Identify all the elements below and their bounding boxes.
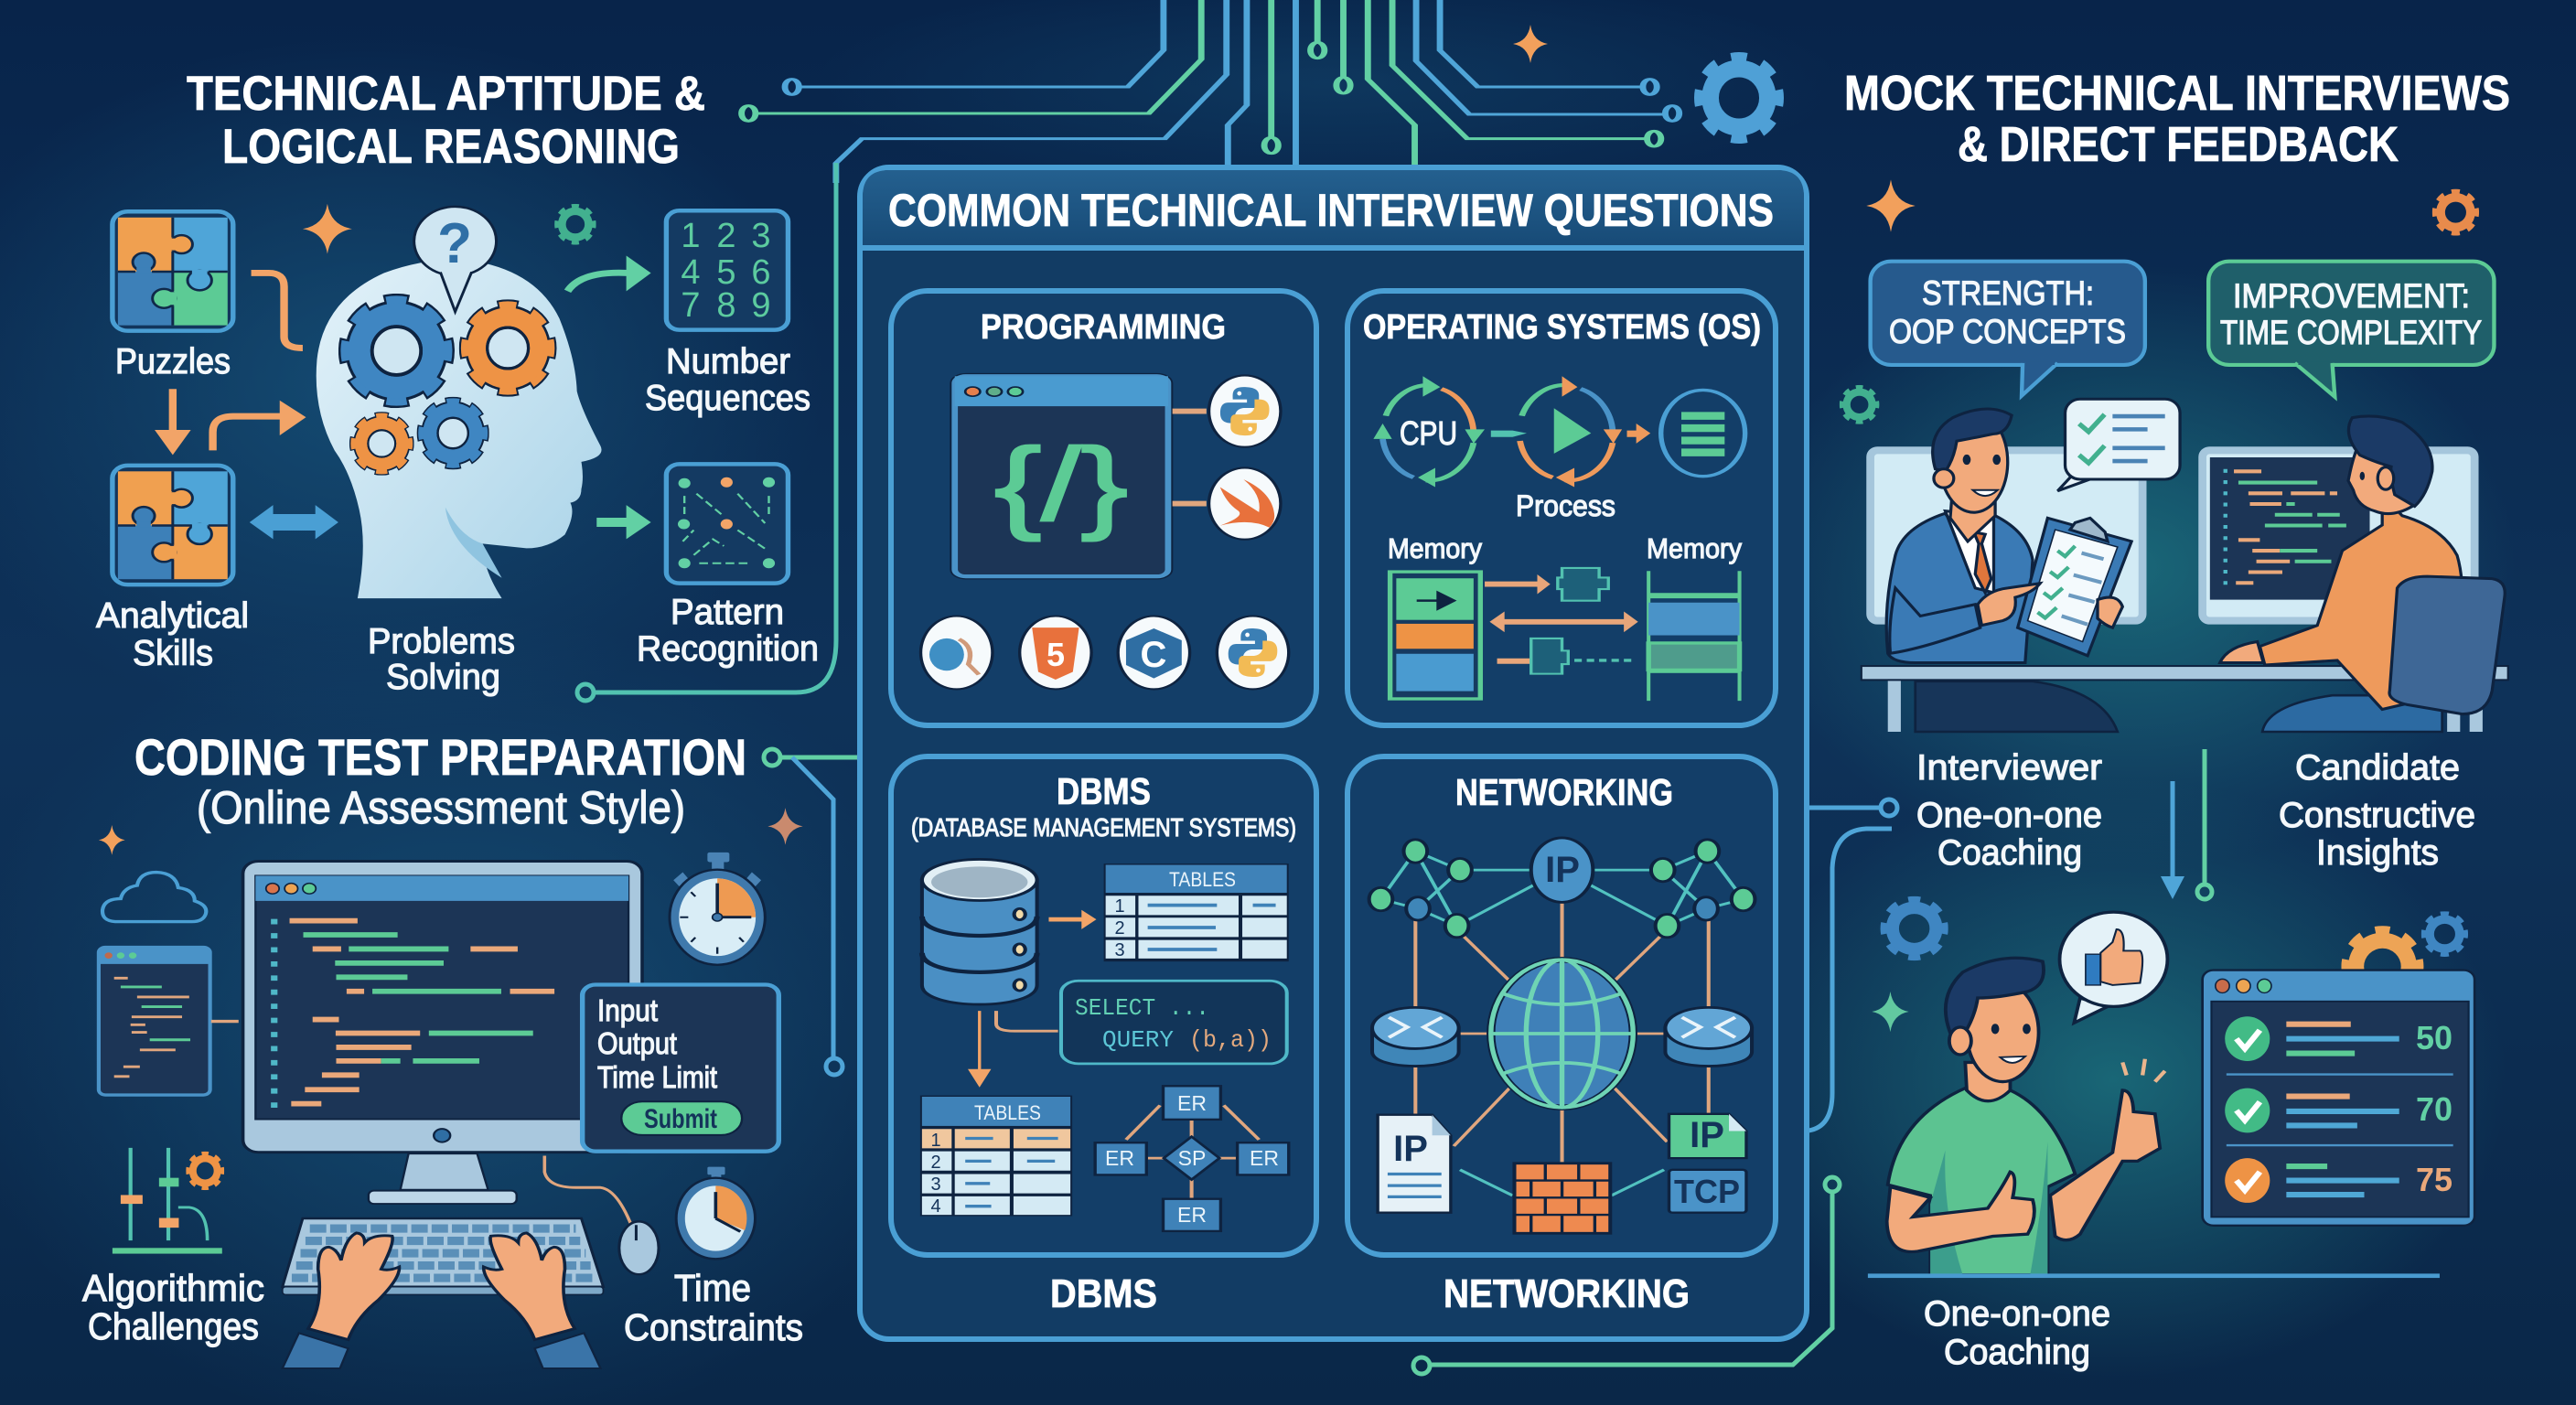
- text: submit: Submit: [644, 1104, 717, 1134]
- arrow: curved green: [567, 256, 651, 291]
- icon: routers: [1372, 1007, 1752, 1067]
- network labels: TCP: [1674, 1173, 1740, 1210]
- heading: technical aptitude: TECHNICAL APTITUDE &: [187, 67, 705, 121]
- label: analytical skills: [96, 596, 249, 673]
- nodes: [1369, 840, 1755, 938]
- icon: document green: [1669, 1114, 1746, 1158]
- callout: improvement: [2208, 262, 2494, 397]
- scores: 75: [2416, 1161, 2453, 1198]
- arrow: double blue: [250, 505, 338, 539]
- icon: gears over window: [2347, 915, 2464, 1002]
- label: dbms bottom: DBMS: [1050, 1271, 1157, 1316]
- arrow heads: [155, 401, 306, 455]
- icon: mini code window: [99, 948, 239, 1095]
- heading: mock interviews: & DIRECT FEEDBACK: [1958, 117, 2399, 172]
- icon: swift: [1209, 467, 1281, 540]
- coaching scene: [1868, 901, 2474, 1278]
- icon: stars: [99, 808, 803, 855]
- panel: coding test preparation: [82, 728, 803, 1368]
- panel: technical aptitude: [96, 67, 819, 697]
- icon: left monitor: [1871, 450, 2142, 621]
- label: candidate: Insights: [2316, 833, 2439, 873]
- table and sql text: SELECT ...: [1075, 994, 1209, 1022]
- panel: mock technical interviews: [1842, 66, 2510, 1372]
- card text: Time Limit: [597, 1060, 717, 1094]
- text: question mark: ?: [437, 212, 472, 275]
- label: problems solving: Solving: [386, 658, 500, 697]
- card text: Output: [597, 1026, 677, 1060]
- icon: star: [303, 204, 352, 254]
- icon: queue: [1661, 390, 1745, 477]
- heading: coding test preparation: (Online Assessment Style): [197, 782, 685, 833]
- table and sql text: TABLES: [974, 1101, 1041, 1124]
- node: ip: [1531, 838, 1593, 902]
- table and sql text: 2: [930, 1153, 941, 1173]
- table and sql text: 4: [930, 1196, 941, 1217]
- icon: code window: [955, 376, 1168, 576]
- trace: dashed: [1574, 657, 1637, 664]
- icon: memory blocks: [1648, 571, 1740, 701]
- card text: [597, 993, 717, 1094]
- sub-panel: networking: [1347, 756, 1776, 1255]
- heading: networking: NETWORKING: [1455, 771, 1673, 813]
- number grid: 8: [716, 286, 736, 325]
- table and sql text: 1: [1114, 896, 1125, 917]
- icon: cloud: [102, 873, 206, 922]
- heading: dbms: [911, 770, 1296, 842]
- callout text: improvement: IMPROVEMENT:: [2233, 277, 2470, 315]
- number grid: 5: [716, 253, 736, 292]
- callout text: improvement: [2220, 277, 2482, 351]
- text: code brace: {/}: [994, 427, 1128, 542]
- icon: keyboard: [283, 1218, 603, 1294]
- icon: number frame: [666, 210, 788, 330]
- icon: orange star top centre: [1513, 25, 1548, 63]
- table and sql text: ER: [1177, 1091, 1207, 1115]
- callout text: strength: [1889, 274, 2126, 350]
- number grid: [681, 217, 771, 325]
- links: [1380, 851, 1744, 1196]
- icon: stopwatch large: [670, 853, 765, 965]
- label: puzzles: Puzzles: [115, 342, 231, 381]
- icon: query box: [996, 981, 1287, 1064]
- card: input output: [583, 984, 778, 1152]
- icon: head with gears: [317, 207, 602, 598]
- label: one-on-one coaching: One-on-one: [1924, 1294, 2110, 1334]
- callout text: improvement: TIME COMPLEXITY: [2220, 314, 2482, 351]
- connectors: [1173, 412, 1207, 504]
- heading: common technical interview questions: COMMON TECHNICAL INTERVIEW QUESTIONS: [888, 185, 1774, 236]
- arrows: memory: [1485, 574, 1638, 664]
- label: interviewer: [1916, 748, 2102, 873]
- text: process: Process: [1516, 489, 1615, 522]
- arrow: straight green: [596, 505, 651, 539]
- label: algorithmic challenges: Challenges: [88, 1305, 259, 1347]
- figure: coach: [1887, 958, 2165, 1275]
- heading: mock interviews: [1844, 66, 2510, 172]
- number grid: 3: [751, 217, 771, 255]
- text: html5 and c marks: [1046, 635, 1166, 675]
- figure: candidate: [2220, 416, 2505, 714]
- number grid: 6: [751, 253, 771, 292]
- card: score window: [2203, 971, 2474, 1226]
- sub-panel: dbms: [891, 756, 1316, 1255]
- icon: python: [1209, 375, 1281, 447]
- panel: common technical interview questions: [860, 167, 1807, 1339]
- arrow: down: [971, 1011, 989, 1085]
- icon: document ip: [1378, 1115, 1451, 1213]
- label: pattern recognition: Pattern: [671, 593, 784, 632]
- table and sql text: 3: [930, 1174, 941, 1195]
- number grid: 9: [751, 286, 771, 325]
- icon: puzzle top: [113, 211, 233, 331]
- table and sql text: TABLES: [1169, 868, 1236, 891]
- table and sql text: ER: [1177, 1203, 1207, 1227]
- icon: tcp box: [1669, 1170, 1746, 1213]
- arrow: to table: [1048, 910, 1097, 929]
- icon: table top: [1106, 865, 1287, 960]
- label: time constraints: [624, 1267, 803, 1348]
- illustration: aptitude icons: [113, 204, 788, 598]
- network diagram: [1369, 838, 1755, 1233]
- number grid: 4: [681, 253, 701, 292]
- text: html5 and c marks: 5: [1046, 636, 1065, 673]
- label: one-on-one coaching: [1924, 1294, 2110, 1372]
- icon: language logo one: [921, 616, 993, 689]
- desk: [1862, 666, 2508, 732]
- label: interviewer: One-on-one: [1916, 796, 2102, 835]
- card text: Input: [597, 993, 658, 1027]
- main frame: [860, 167, 1807, 1339]
- icon: html5: [1020, 616, 1091, 689]
- icon: process cycle: [1520, 376, 1622, 487]
- label: candidate: [2279, 748, 2475, 873]
- circuit traces: sides: [577, 163, 2212, 1374]
- arrow: cpu to process: [1491, 431, 1527, 437]
- table and sql text: 3: [1114, 940, 1125, 960]
- icon: globe: [1491, 960, 1633, 1108]
- label: time constraints: Time: [674, 1267, 751, 1309]
- figure: interviewer: [1886, 409, 2131, 662]
- circuit traces: top: [742, 0, 1680, 183]
- label: analytical skills: Skills: [133, 634, 213, 673]
- callout text: strength: STRENGTH:: [1922, 274, 2094, 312]
- number grid: 7: [681, 286, 701, 325]
- heading: operating systems: OPERATING SYSTEMS (OS): [1363, 308, 1761, 347]
- number grid: 2: [716, 217, 736, 255]
- icon: monitor: [243, 862, 642, 1204]
- icon: puzzle bottom: [113, 466, 233, 585]
- heading: dbms: (DATABASE MANAGEMENT SYSTEMS): [911, 813, 1296, 842]
- os icons: [1373, 376, 1745, 701]
- label: candidate: Candidate: [2295, 748, 2460, 788]
- icon: gear and star: [1872, 901, 1944, 1032]
- text: memory left: Memory: [1388, 532, 1482, 564]
- number grid: 1: [681, 217, 701, 255]
- network labels: [1393, 850, 1740, 1210]
- label: networking bottom: NETWORKING: [1444, 1271, 1690, 1316]
- baseline: [1868, 1273, 2440, 1278]
- label: problems solving: Problems: [368, 622, 515, 661]
- icon: firewall: [1514, 1164, 1610, 1233]
- table and sql text: 2: [1114, 918, 1125, 938]
- heading: programming: PROGRAMMING: [981, 308, 1226, 347]
- icon: pattern recognition: [666, 464, 788, 584]
- label: time constraints: Constraints: [624, 1306, 803, 1348]
- icon: feedback bubble: [2057, 399, 2180, 491]
- text: memory right: Memory: [1647, 532, 1742, 564]
- arrow: process to queue: [1627, 424, 1650, 444]
- sub-panel: operating systems: [1347, 291, 1776, 725]
- icon: hands: [283, 1233, 600, 1368]
- icon: decorations: [1842, 179, 2475, 422]
- icon: thumbs up bubble: [2060, 912, 2167, 1023]
- icon: right monitor: [2203, 450, 2474, 621]
- network labels: IP: [1393, 1129, 1428, 1169]
- icon: database: [922, 859, 1037, 1004]
- icon: chips: [1531, 568, 1608, 674]
- callout: strength: [1871, 262, 2145, 396]
- icon: table bottom: [922, 1097, 1070, 1215]
- button: submit: [621, 1101, 742, 1135]
- table and sql text: (b,a)): [1189, 1026, 1272, 1054]
- heading: technical aptitude: [187, 67, 705, 174]
- arrows: orange: [173, 273, 303, 450]
- scores: 50: [2416, 1019, 2453, 1056]
- code lines: [274, 919, 554, 1110]
- scores: [2416, 1019, 2453, 1198]
- label: pattern recognition: [637, 593, 819, 669]
- heading: dbms: DBMS: [1057, 770, 1151, 812]
- label: number sequences: Sequences: [645, 379, 810, 418]
- label: candidate: Constructive: [2279, 796, 2475, 835]
- network labels: IP: [1690, 1115, 1724, 1155]
- table and sql text: ER: [1105, 1146, 1134, 1170]
- interview scene: [1842, 179, 2508, 732]
- table and sql text: [930, 868, 1279, 1227]
- table and sql text: QUERY: [1102, 1026, 1174, 1054]
- label: algorithmic challenges: [82, 1267, 264, 1347]
- label: pattern recognition: Recognition: [637, 629, 819, 669]
- label: one-on-one coaching: Coaching: [1944, 1333, 2090, 1372]
- sub-panel: programming: [891, 291, 1316, 725]
- label: algorithmic challenges: Algorithmic: [82, 1267, 264, 1309]
- network labels: IP: [1545, 850, 1580, 890]
- icon: python small: [1217, 616, 1289, 689]
- heading: coding test preparation: CODING TEST PREPARATION: [134, 728, 746, 786]
- icon: algorithm sliders: [113, 1148, 222, 1254]
- label: problems solving: [368, 622, 515, 697]
- table and sql text: ER: [1250, 1146, 1279, 1170]
- icon: stopwatch small: [676, 1167, 756, 1259]
- icon: cpu cycle: [1373, 376, 1485, 487]
- heading: coding test preparation: [134, 728, 746, 833]
- scores: 70: [2416, 1090, 2453, 1128]
- icon: green gear: [557, 207, 593, 241]
- wire and mouse: [544, 1156, 659, 1274]
- illustration: coding workstation: [99, 808, 803, 1368]
- text: cpu: CPU: [1400, 414, 1457, 452]
- heading: technical aptitude: LOGICAL REASONING: [222, 120, 680, 174]
- icon: large blue gear: [1701, 59, 1777, 137]
- icon: memory stack: [1390, 572, 1480, 699]
- programming icons: [921, 375, 1289, 689]
- text: html5 and c marks: C: [1141, 635, 1166, 675]
- label: interviewer: Coaching: [1937, 833, 2082, 873]
- dbms icons: [922, 859, 1289, 1231]
- callout text: strength: OOP CONCEPTS: [1889, 313, 2126, 350]
- label: interviewer: Interviewer: [1916, 748, 2102, 788]
- icon: c++: [1118, 616, 1190, 689]
- clipboard: [2018, 518, 2131, 656]
- table and sql text: 1: [930, 1131, 941, 1151]
- label: number sequences: [645, 342, 810, 418]
- table and sql text: SP: [1178, 1146, 1206, 1170]
- icon: er diagram: [1095, 1086, 1289, 1231]
- label: analytical skills: Analytical: [96, 596, 249, 636]
- label: number sequences: Number: [666, 342, 790, 381]
